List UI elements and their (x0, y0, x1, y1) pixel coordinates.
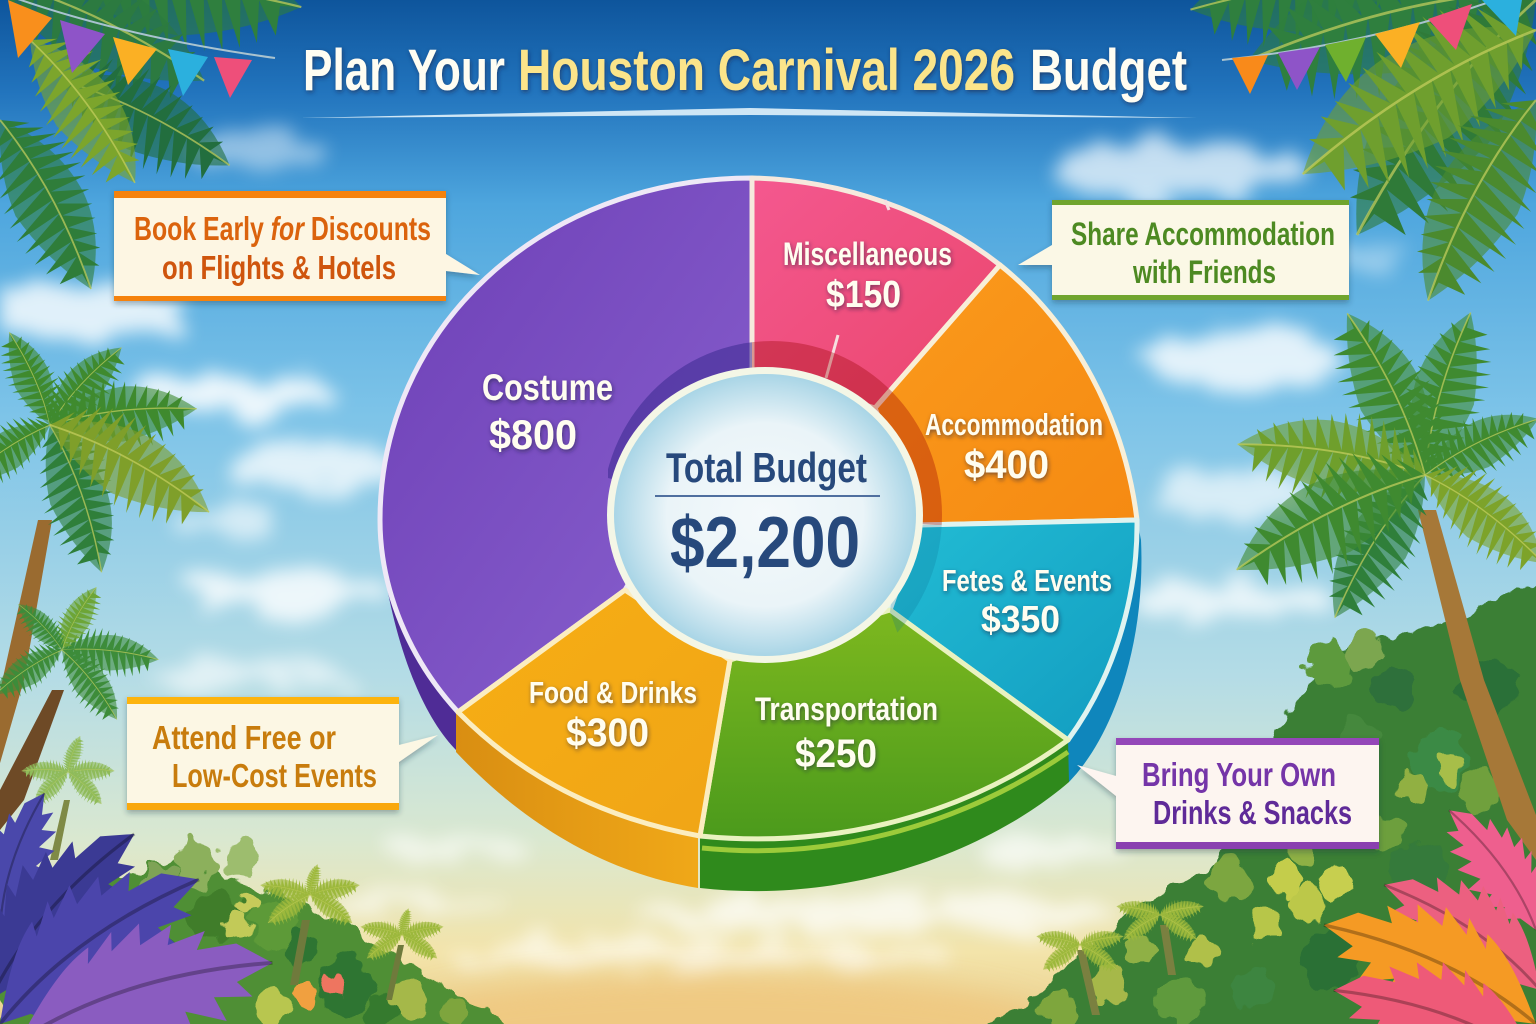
palm: left trunks (0, 520, 404, 1000)
label: food and drinks (529, 675, 697, 755)
palm fronds: top right (1187, 0, 1536, 321)
foliage: bottom left (0, 840, 540, 1024)
inner shadow ring: purple slice (608, 342, 752, 479)
palm: distant bottom right pair (1034, 890, 1206, 1015)
callout: book early: on Flights & Hotels (162, 249, 396, 286)
inner shadow ring: warm slices (752, 341, 942, 525)
palm: left tall (0, 325, 229, 584)
slice: transportation (700, 610, 1068, 839)
tropical leaves: pink and orange (1303, 785, 1536, 1024)
total budget label: Total Budget (666, 444, 867, 491)
palm fronds: top left (0, 0, 306, 306)
label: food and drinks: Food & Drinks (529, 675, 697, 710)
title underline (300, 108, 1197, 118)
label: costume: $800 (489, 411, 577, 458)
label: transportation: $250 (795, 732, 877, 776)
foliage: bottom right (960, 580, 1536, 1024)
callout: share accommodation (1018, 200, 1349, 300)
label: accommodation: $400 (964, 443, 1049, 487)
centre hub (607, 367, 923, 663)
label: fetes and events: $350 (981, 599, 1060, 641)
slice crack marks (826, 200, 889, 378)
label: transportation: Transportation (755, 691, 938, 727)
label: fetes and events: Fetes & Events (942, 563, 1112, 598)
slice: fetes and events (890, 520, 1137, 740)
callout: attend free: Attend Free or (152, 719, 336, 756)
title: Budget (1030, 38, 1187, 103)
bunting: left (8, 0, 275, 98)
callout: share accommodation: with Friends (1132, 254, 1276, 290)
palm: left small crown (0, 579, 160, 729)
callout: attend free: Low-Cost Events (172, 757, 377, 794)
label: accommodation (925, 407, 1103, 487)
palm: distant left (20, 735, 116, 809)
label: transportation (755, 691, 938, 776)
budget pie chart (380, 178, 1141, 891)
pie: 3D side wall (384, 520, 1141, 891)
green lip highlight (702, 752, 1068, 851)
beach strip (390, 976, 1050, 1024)
label: miscellaneous (783, 236, 952, 316)
total budget value: $2,200 (670, 503, 860, 583)
callout: book early: Book Early for Discounts (134, 210, 431, 247)
callout: share accommodation: Share Accommodation (1071, 216, 1335, 252)
palm: right tall (1217, 298, 1536, 860)
callout: bring your own: Drinks & Snacks (1153, 794, 1352, 831)
slice: miscellaneous (752, 178, 1000, 408)
label: accommodation: Accommodation (925, 407, 1103, 442)
label: miscellaneous: $150 (826, 274, 901, 316)
label: costume: Costume (482, 367, 613, 408)
callout: bring your own: Bring Your Own (1142, 756, 1336, 793)
slice: accommodation (875, 265, 1137, 525)
callout: book early (114, 191, 480, 301)
label: fetes and events (942, 563, 1112, 641)
clouds (0, 134, 1400, 969)
label: costume (482, 367, 613, 458)
inner shadow ring: teal slice (890, 525, 942, 632)
title: Houston Carnival 2026 (518, 38, 1015, 103)
palm: distant bottom left pair (257, 864, 446, 964)
bunting: right (1222, 0, 1522, 94)
callout: bring your own (1077, 738, 1379, 849)
title: Plan Your (303, 38, 505, 103)
label: food and drinks: $300 (566, 711, 649, 755)
slice: food and drinks (458, 590, 730, 836)
callout: attend free (127, 697, 438, 810)
label: miscellaneous: Miscellaneous (783, 236, 952, 272)
slice: costume (380, 178, 752, 712)
tropical leaves: purple (0, 780, 289, 1024)
